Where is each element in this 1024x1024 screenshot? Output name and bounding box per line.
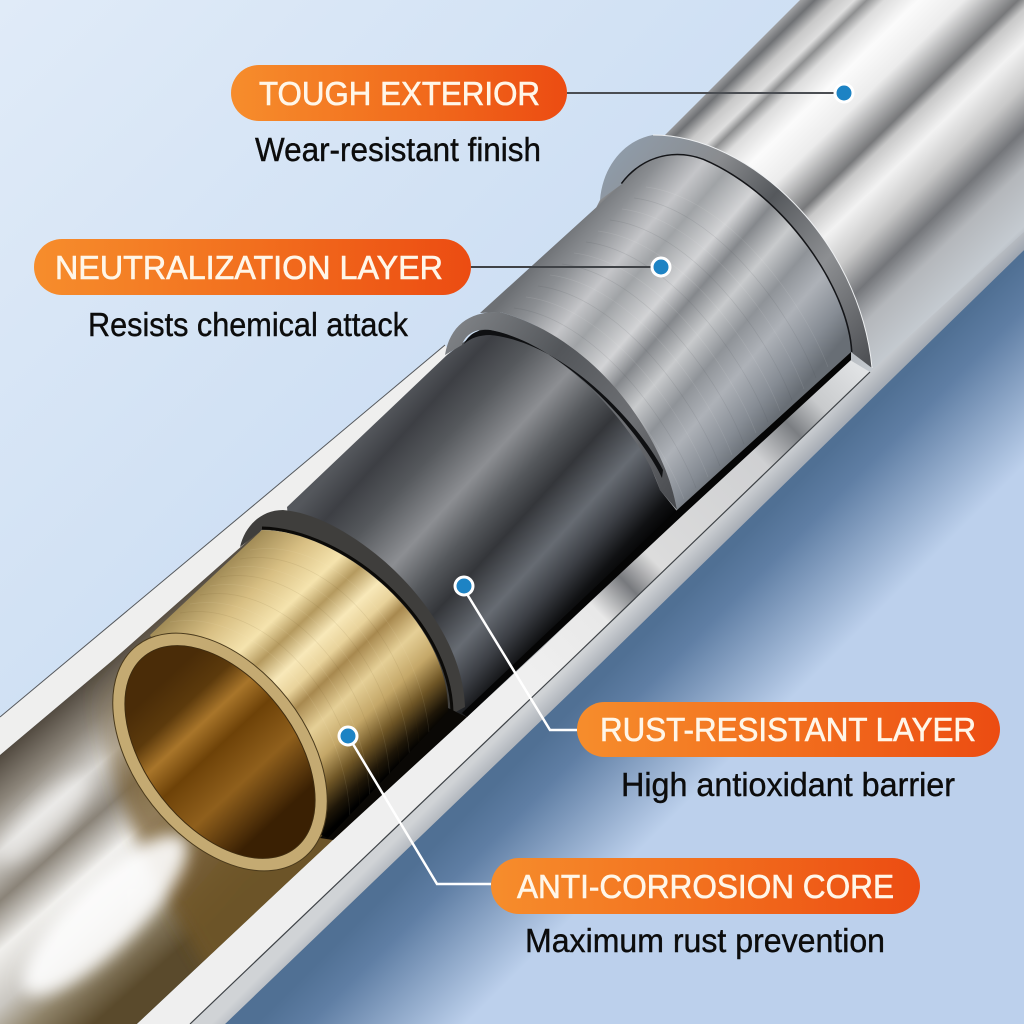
lower cut wall flange — [137, 360, 870, 1024]
description: High antioxidant barrier — [621, 766, 955, 803]
black gap below steel layer — [462, 352, 851, 717]
marker dot — [652, 258, 670, 276]
inner cavity — [0, 530, 350, 1024]
callout: anti-corrosion core — [339, 727, 920, 959]
pill label — [577, 702, 1000, 757]
upper cut wall flange — [0, 345, 470, 755]
brass bore — [87, 610, 353, 894]
marker dot — [455, 577, 473, 595]
brass core — [112, 530, 448, 872]
pill label: TOUGH EXTERIOR — [259, 75, 540, 112]
lower outer wall band — [190, 232, 1024, 1024]
callout: tough exterior — [231, 65, 853, 168]
ring at end of outer tube — [600, 135, 872, 368]
brass end rim — [69, 593, 371, 911]
description: Maximum rust prevention — [525, 922, 885, 959]
steel layer rim — [445, 312, 677, 510]
description: Wear-resistant finish — [255, 131, 541, 168]
pill label — [231, 65, 567, 121]
neutralization layer: brushed steel — [480, 155, 851, 510]
pill label — [34, 239, 471, 295]
callout: rust-resistant layer — [455, 577, 1000, 803]
callout: neutralization layer — [34, 239, 670, 343]
marker dot — [835, 84, 853, 102]
pill label: RUST-RESISTANT LAYER — [600, 711, 976, 748]
marker dot — [339, 727, 357, 745]
pill label: ANTI-CORROSION CORE — [517, 868, 894, 905]
dark rust-resistant layer — [287, 322, 680, 717]
black gap below brass — [320, 708, 467, 840]
dark collar behind brass — [240, 510, 465, 716]
pill label: NEUTRALIZATION LAYER — [55, 249, 443, 286]
description: Resists chemical attack — [88, 306, 408, 343]
pill label — [491, 858, 920, 914]
